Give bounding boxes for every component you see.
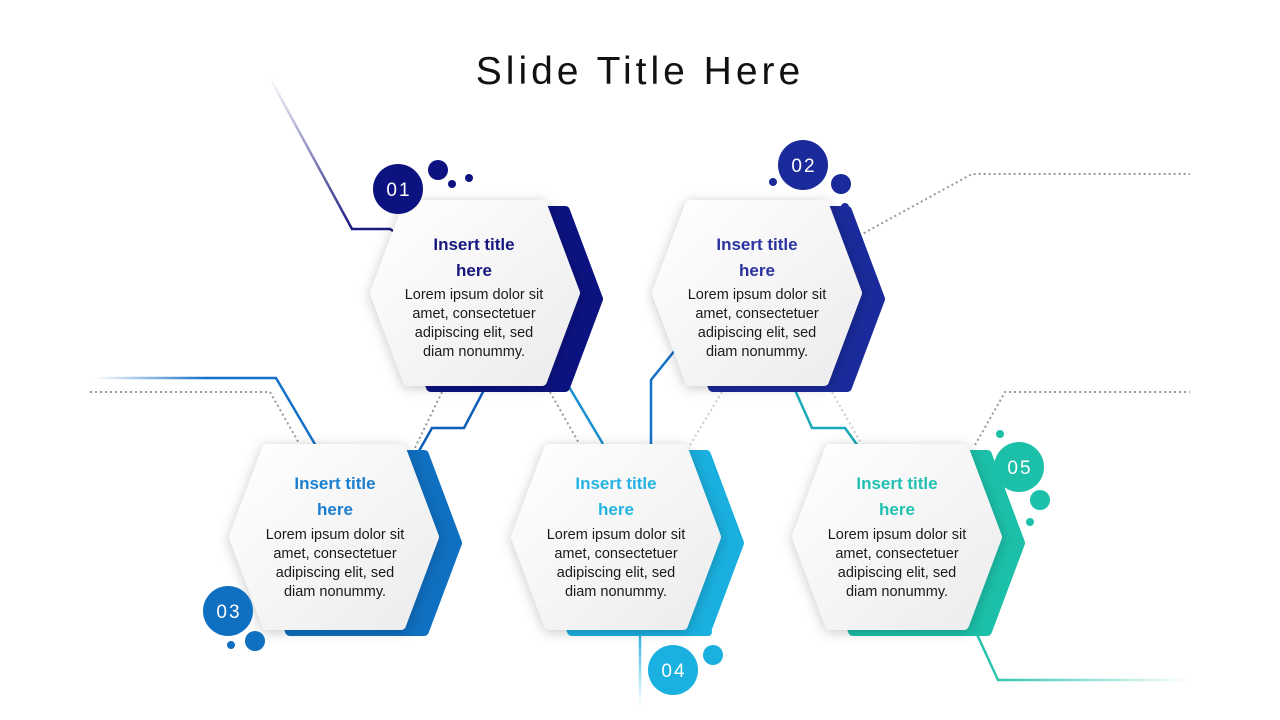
hexagon 01 bbox=[375, 205, 598, 387]
hexagon 01: adipiscing elit, sed bbox=[415, 325, 533, 341]
hexagon 01: Lorem ipsum dolor sit bbox=[405, 287, 543, 303]
hexagon 02: amet, consectetuer bbox=[695, 306, 819, 322]
hexagon 05: adipiscing elit, sed bbox=[838, 565, 956, 581]
hexagon 03: amet, consectetuer bbox=[273, 546, 397, 562]
hexagon 04: here bbox=[598, 500, 634, 519]
hexagon 02: Lorem ipsum dolor sit bbox=[688, 287, 826, 303]
hexagon 05: here bbox=[879, 500, 915, 519]
badge 02 bbox=[769, 140, 851, 211]
badge 02: 02 bbox=[791, 156, 817, 177]
badge 01 bbox=[373, 160, 473, 214]
hexagon 04: diam nonummy. bbox=[565, 584, 667, 600]
hexagon 03: adipiscing elit, sed bbox=[276, 565, 394, 581]
hexagon 04: Insert title bbox=[575, 474, 657, 493]
hexagon 02: diam nonummy. bbox=[706, 344, 808, 360]
hexagon 01: amet, consectetuer bbox=[412, 306, 536, 322]
hexagon 01: here bbox=[456, 261, 492, 280]
hexagon 02 bbox=[657, 205, 880, 387]
badge 04 bbox=[648, 628, 723, 695]
hexagon 05: diam nonummy. bbox=[846, 584, 948, 600]
hexagon 03: Insert title bbox=[294, 474, 376, 493]
badge 04: 04 bbox=[661, 661, 687, 682]
hexagon 04: adipiscing elit, sed bbox=[557, 565, 675, 581]
hexagon 01: Insert title bbox=[433, 235, 515, 254]
hexagon 03: here bbox=[317, 500, 353, 519]
hexagon 05: amet, consectetuer bbox=[835, 546, 959, 562]
hexagon 02: adipiscing elit, sed bbox=[698, 325, 816, 341]
hexagon 01: diam nonummy. bbox=[423, 344, 525, 360]
hexagon 03: diam nonummy. bbox=[284, 584, 386, 600]
hexagon 04: Lorem ipsum dolor sit bbox=[547, 527, 685, 543]
badge 01: 01 bbox=[386, 180, 412, 201]
badge 05: 05 bbox=[1007, 458, 1033, 479]
hexagon 03 bbox=[234, 449, 457, 631]
connector lines bbox=[90, 78, 1190, 705]
hexagon 05: Insert title bbox=[856, 474, 938, 493]
hexagon 02: Insert title bbox=[716, 235, 798, 254]
hexagon 03: Lorem ipsum dolor sit bbox=[266, 527, 404, 543]
hexagon 04: amet, consectetuer bbox=[554, 546, 678, 562]
badge 05 bbox=[994, 430, 1050, 526]
hexagon 04 bbox=[516, 449, 739, 631]
hexagon 05: Lorem ipsum dolor sit bbox=[828, 527, 966, 543]
badge 03 bbox=[203, 586, 265, 651]
hexagon 02: here bbox=[739, 261, 775, 280]
badge 03: 03 bbox=[216, 602, 242, 623]
hexagon 05 bbox=[797, 449, 1020, 631]
title: Slide Title Here bbox=[476, 50, 804, 93]
